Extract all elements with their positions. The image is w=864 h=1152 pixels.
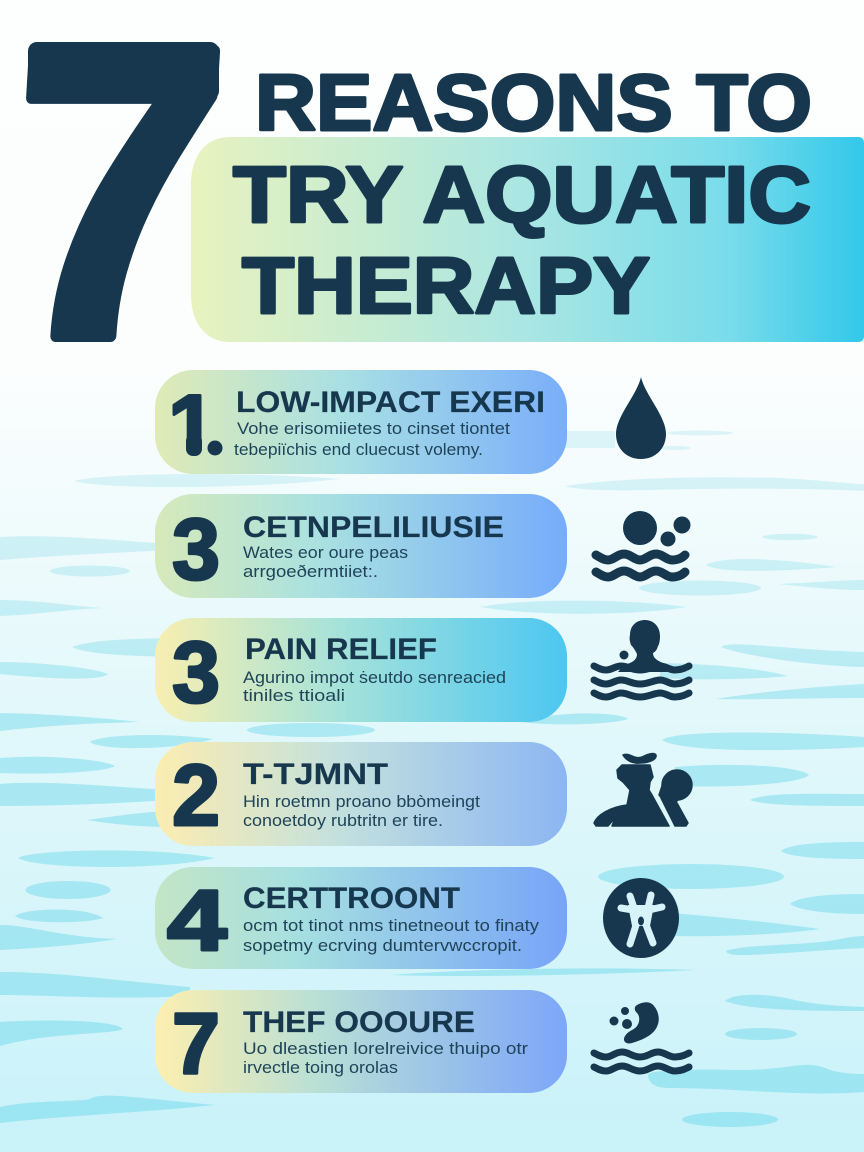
description xyxy=(243,792,480,830)
heading: CETNPELILIUSIE xyxy=(243,511,504,544)
description xyxy=(234,419,510,459)
description: tebepiïchis end cluecust volemy. xyxy=(234,440,483,459)
card background xyxy=(155,618,567,722)
icon: person in water xyxy=(594,620,689,697)
number 3: 3 xyxy=(172,625,220,721)
description: conoetdoy rubtritn er tire. xyxy=(243,811,443,830)
card background xyxy=(155,494,567,598)
card 2 xyxy=(155,494,567,598)
icon: person with ball xyxy=(594,754,692,826)
icon: water drop xyxy=(616,377,666,459)
card 4 xyxy=(155,742,567,846)
description: Agurino impot ṡeutdo senreacied xyxy=(243,668,506,687)
description: sopetmy ecrving dumtervwccropit. xyxy=(243,936,522,955)
heading: CERTTROONT xyxy=(243,882,460,915)
number 2: 2 xyxy=(172,748,220,844)
description: Vohe erisomiietes to cinset tiontet xyxy=(237,419,510,438)
description: Uo dleastien lorelreivice thuipo otr xyxy=(243,1039,528,1058)
description: Wates eor oure peas xyxy=(243,543,408,562)
description: irvectle toing orolas xyxy=(243,1058,398,1077)
description: tiniles ttioali xyxy=(243,686,345,705)
number 1 xyxy=(172,394,202,456)
card 3: pain relief xyxy=(155,618,567,722)
heading: LOW-IMPACT EXERI xyxy=(236,386,545,419)
description xyxy=(243,668,506,705)
title line 1: REASONS TO xyxy=(255,58,812,147)
description xyxy=(243,916,540,955)
description: Hin roetmn proano bbòmeingt xyxy=(243,792,480,811)
title xyxy=(0,0,864,424)
card 5 xyxy=(155,867,567,969)
card background xyxy=(155,370,567,474)
heading: THEF OOOURE xyxy=(243,1006,475,1039)
card 6 xyxy=(155,990,567,1093)
icon: starfish in circle xyxy=(603,878,679,958)
description: arrgoeðermtiiet:. xyxy=(243,562,378,581)
description xyxy=(243,1039,528,1077)
title line 2: TRY AQUATIC xyxy=(233,150,811,239)
water streaks xyxy=(0,430,864,1127)
icon: bubbles and waves xyxy=(596,511,690,577)
card background xyxy=(155,742,567,846)
heading: T-TJMNT xyxy=(243,758,388,791)
number 3: 3 xyxy=(172,502,220,598)
title line 3: THERAPY xyxy=(242,241,650,330)
card background xyxy=(155,990,567,1093)
description: ocm tot tinot nms tinetneout to finaty xyxy=(243,916,540,935)
card background xyxy=(155,867,567,969)
number 1: 1 xyxy=(168,378,216,474)
number 4: 4 xyxy=(167,873,227,969)
icon: splash and waves xyxy=(594,1002,689,1071)
number dot xyxy=(208,440,222,456)
heading: PAIN RELIEF xyxy=(245,633,437,666)
number 7: 7 xyxy=(172,996,220,1092)
description xyxy=(243,543,408,581)
card 1: low-impact exercise xyxy=(155,370,567,474)
title highlight panel xyxy=(191,137,864,342)
